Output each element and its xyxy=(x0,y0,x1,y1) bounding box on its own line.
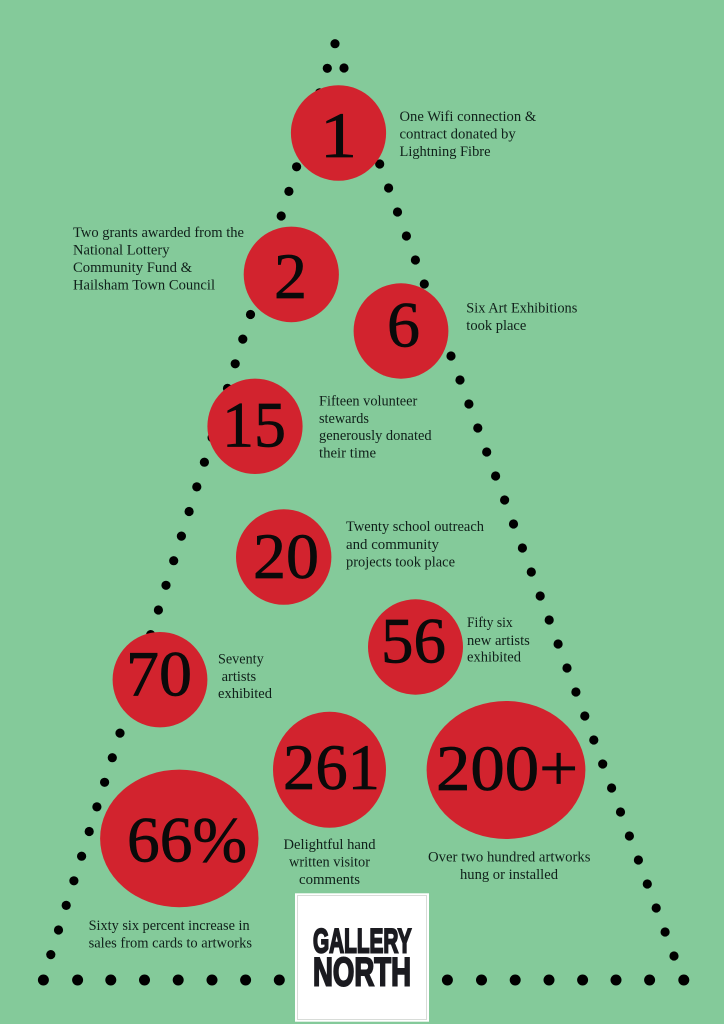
stat circle: 261: 261 xyxy=(283,732,380,804)
label: volunteer stewards: their time xyxy=(319,446,376,462)
stat circle: 70: 70 xyxy=(126,639,192,711)
label: new artists: exhibited xyxy=(467,650,521,666)
logo: Gallery North: GALLERY xyxy=(313,922,412,960)
stat circle: 66%: 66% xyxy=(127,805,247,877)
label: grants: National Lottery xyxy=(73,243,170,259)
label: wifi connection: contract donated by xyxy=(400,126,516,142)
label: volunteer stewards: stewards xyxy=(319,411,369,427)
label: wifi connection: One Wifi connection & xyxy=(400,109,537,125)
stat circle: 56 xyxy=(368,599,463,695)
stat circle: 20 xyxy=(236,509,331,605)
label: exhibitions: took place xyxy=(466,318,527,334)
label: visitor comments: Delightful hand xyxy=(284,837,376,853)
stat circle: 6 xyxy=(354,283,448,379)
label: grants: Hailsham Town Council xyxy=(73,278,215,294)
stat circle: 2 xyxy=(244,227,339,322)
label: wifi connection: Lightning Fibre xyxy=(400,144,491,160)
label: school outreach: projects took place xyxy=(346,554,455,570)
label: school outreach: Twenty school outreach xyxy=(346,519,484,535)
label: school outreach xyxy=(346,519,484,570)
label: volunteer stewards xyxy=(319,393,432,462)
label: sales increase: Sixty six percent increase in xyxy=(89,918,250,934)
label: new artists: Fifty six xyxy=(467,615,513,631)
label: sales increase xyxy=(89,918,252,952)
label: new artists: new artists xyxy=(467,633,530,649)
stat circle: 200+ xyxy=(427,701,585,839)
stat circle: 261 xyxy=(273,712,386,828)
label: visitor comments: written visitor xyxy=(289,855,370,871)
label: seventy artists: artists xyxy=(222,669,256,685)
stat circle: 70 xyxy=(113,632,207,727)
label: visitor comments xyxy=(284,837,376,888)
label: seventy artists: Seventy xyxy=(218,652,264,668)
label: artworks xyxy=(428,850,591,883)
label: grants: Community Fund & xyxy=(73,260,192,276)
stat circle: 1 xyxy=(291,85,386,181)
stat circle: 56: 56 xyxy=(381,606,446,678)
label: school outreach: and community xyxy=(346,537,439,553)
label: wifi connection xyxy=(400,109,537,160)
label: new artists xyxy=(467,615,530,666)
logo: Gallery North xyxy=(295,893,429,1022)
stat circle: 66% xyxy=(100,770,258,907)
stat circle: 1: 1 xyxy=(320,100,357,172)
stat circle: 20: 20 xyxy=(253,521,319,593)
label: visitor comments: comments xyxy=(299,872,360,888)
label: artworks: Over two hundred artworks xyxy=(428,850,591,866)
label: grants xyxy=(73,225,244,294)
label: exhibitions xyxy=(466,300,577,334)
label: volunteer stewards: Fifteen volunteer xyxy=(319,393,417,409)
label: seventy artists: exhibited xyxy=(218,686,272,702)
stat circle: 15: 15 xyxy=(222,390,286,462)
label: sales increase: sales from cards to artworks xyxy=(89,936,252,952)
label: seventy artists xyxy=(218,652,272,702)
stat circle: 200+: 200+ xyxy=(436,733,578,805)
stat circle: 15 xyxy=(207,379,303,474)
label: grants: Two grants awarded from the xyxy=(73,225,244,241)
stat circle: 2: 2 xyxy=(274,241,307,313)
stat circle: 6: 6 xyxy=(387,290,420,362)
label: artworks: hung or installed xyxy=(460,867,558,883)
logo: Gallery North: NORTH xyxy=(313,950,411,994)
label: exhibitions: Six Art Exhibitions xyxy=(466,300,577,316)
label: volunteer stewards: generously donated xyxy=(319,428,432,444)
